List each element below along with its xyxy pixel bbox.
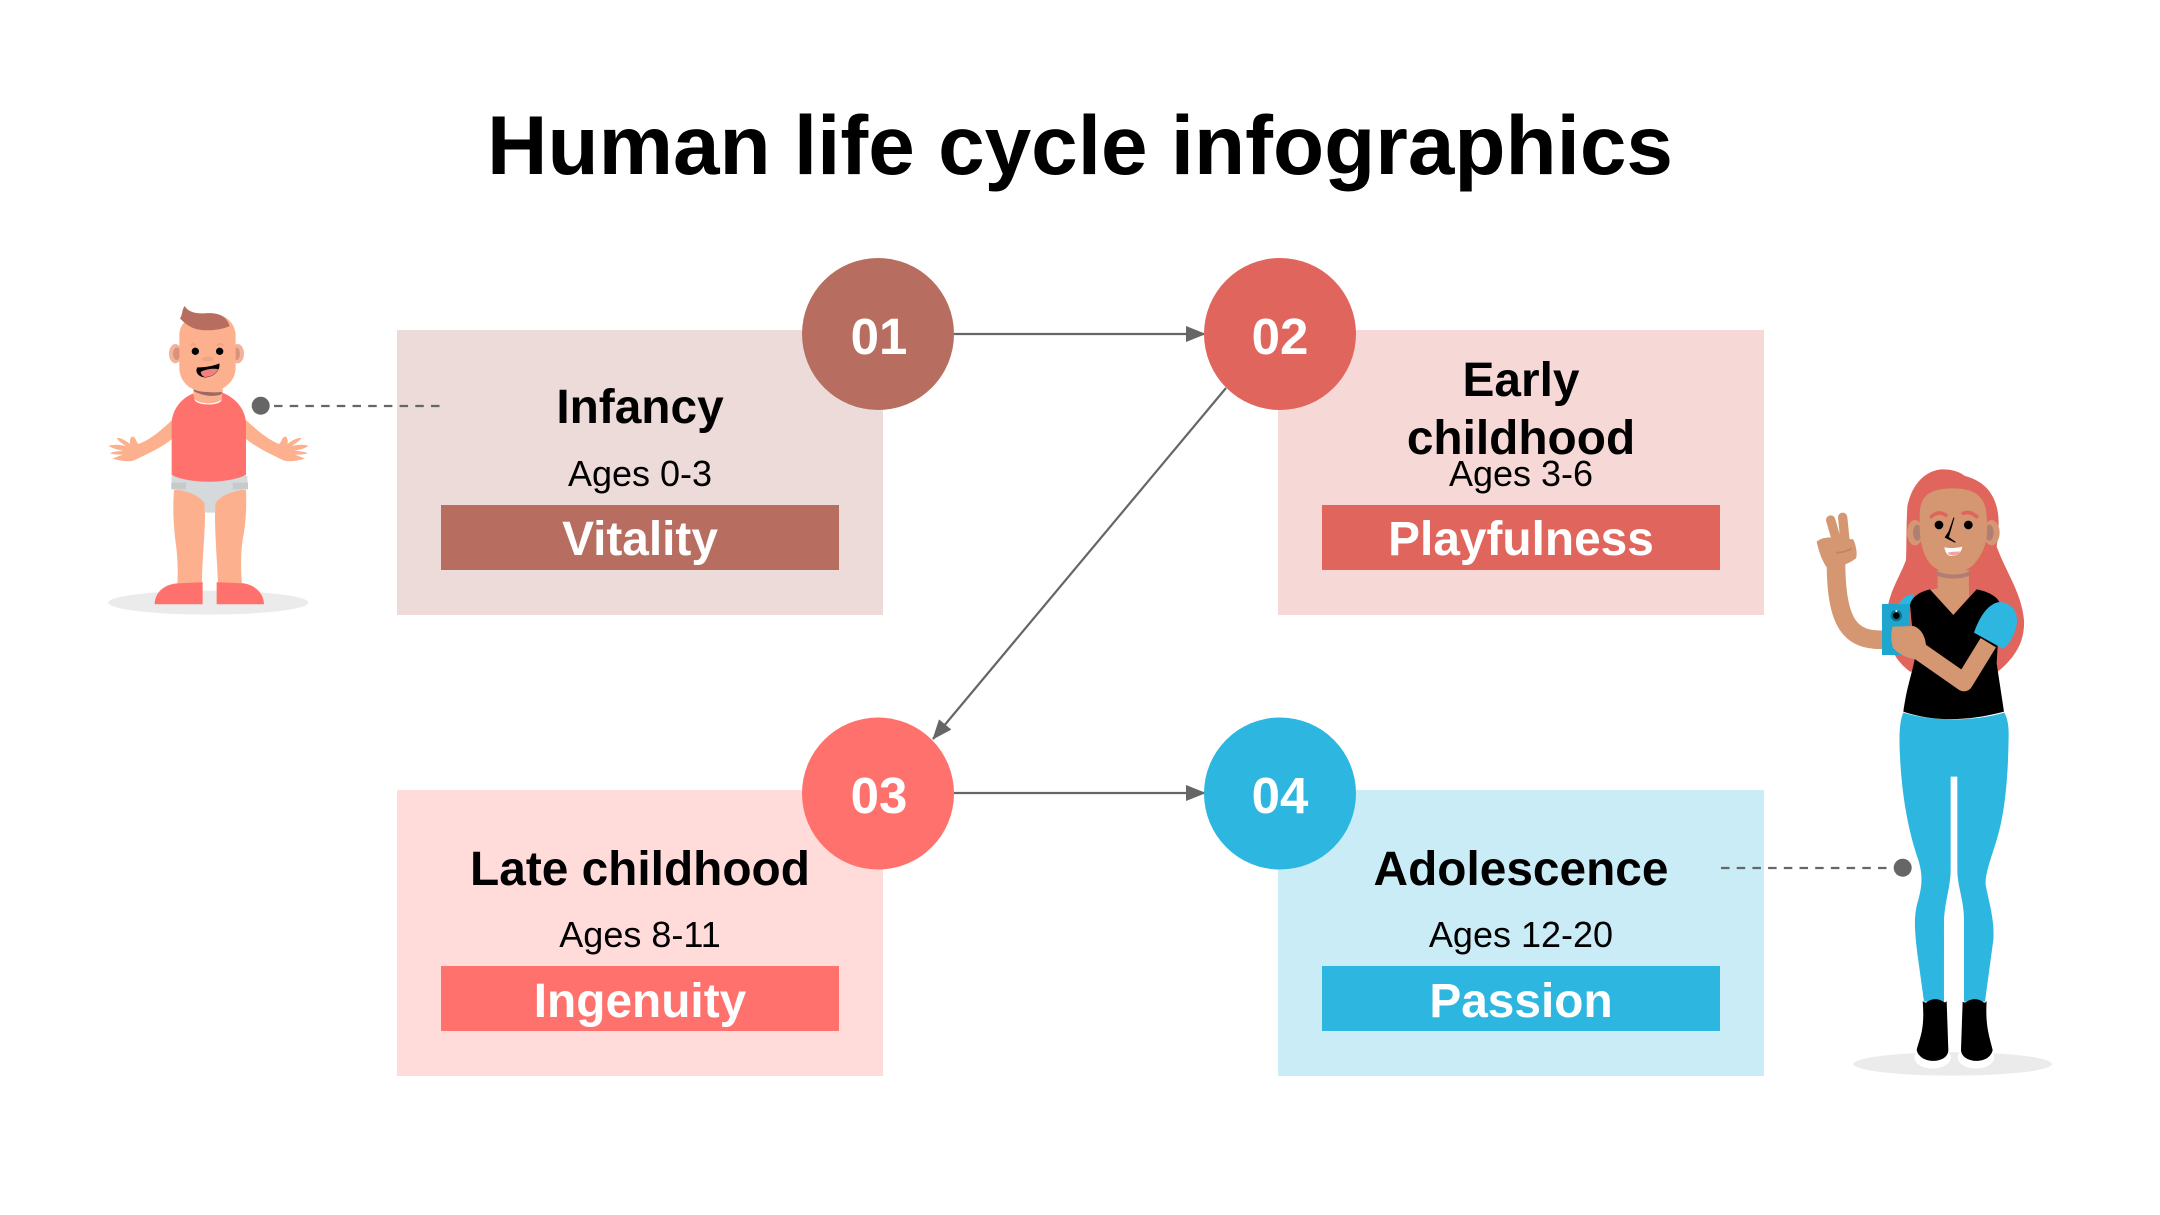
shirt [172, 393, 246, 482]
nose [202, 357, 214, 361]
eyes [1935, 521, 1943, 529]
badge: 01: 01 [851, 308, 907, 365]
heading: early childhood: Early [1463, 354, 1579, 407]
nose [1945, 518, 1955, 542]
diaper [171, 476, 248, 513]
title: Human life cycle infographics [487, 98, 1673, 192]
hair [1887, 469, 2024, 673]
folded arm and hand [1891, 626, 1988, 682]
keyword bar: ingenuity [441, 966, 839, 1031]
head [179, 313, 236, 392]
keyword bar: vitality [441, 505, 839, 570]
panel: adolescence [1278, 790, 1764, 1076]
heading: infancy: Infancy [556, 381, 724, 434]
shirt [1903, 589, 2004, 719]
neck [1930, 570, 1969, 615]
badge: 02 [1204, 258, 1356, 410]
badge: 04: 04 [1252, 767, 1309, 824]
neck [193, 388, 223, 403]
legs [173, 490, 246, 583]
arrow: 01 to 02 [954, 333, 1205, 335]
panel: infancy [397, 330, 883, 615]
connector: infant to panel [252, 397, 442, 415]
text: ages 12-20: Ages 12-20 [1429, 914, 1613, 955]
mouth [1944, 547, 1962, 556]
text: ages 0-3: Ages 0-3 [568, 453, 712, 494]
eyes [192, 348, 199, 355]
hair [180, 306, 230, 330]
raised hand [1817, 517, 1857, 567]
badge: 03: 03 [851, 767, 907, 824]
front sleeve [1974, 602, 2017, 649]
keyword bar: ingenuity: Ingenuity [534, 975, 747, 1028]
arms and hands [109, 419, 308, 461]
phone [1882, 604, 1910, 655]
illustration: adolescent legs [1853, 713, 2052, 1076]
eyebrows [1931, 513, 1977, 517]
badge: 04 [1204, 718, 1356, 870]
connector: adolescent to panel [1721, 859, 1912, 877]
heading: early childhood: childhood [1407, 412, 1635, 465]
keyword bar: passion: Passion [1429, 975, 1613, 1028]
ears [1907, 520, 1923, 545]
mouth [196, 363, 219, 377]
arrow: 02 to 03 [933, 388, 1226, 739]
shoes [155, 582, 264, 604]
heading: late childhood: Late childhood [470, 843, 810, 896]
shoes [1914, 999, 1994, 1069]
panel: late childhood [397, 790, 883, 1076]
back sleeve [1898, 594, 1914, 607]
keyword bar: playfulness [1322, 505, 1720, 570]
keyword bar: vitality: Vitality [562, 513, 718, 566]
text: ages 8-11: Ages 8-11 [559, 914, 721, 955]
keyword bar: passion [1322, 966, 1720, 1031]
illustration: infant [108, 306, 308, 615]
badge: 01 [802, 258, 954, 410]
arrow: 03 to 04 [954, 792, 1205, 794]
jeans [1899, 713, 2009, 1002]
eyebrows [191, 344, 223, 346]
illustration: adolescent upper body [1817, 469, 2024, 719]
raised arm [1836, 562, 1885, 640]
face [1920, 488, 1987, 572]
ears [169, 344, 182, 363]
neck shadow [1936, 571, 1970, 578]
badge: 03 [802, 718, 954, 870]
text: ages 3-6: Ages 3-6 [1449, 453, 1593, 494]
keyword bar: playfulness: Playfulness [1388, 513, 1654, 566]
heading: adolescence: Adolescence [1374, 843, 1668, 896]
badge: 02: 02 [1252, 308, 1308, 365]
panel: early childhood [1278, 330, 1764, 615]
